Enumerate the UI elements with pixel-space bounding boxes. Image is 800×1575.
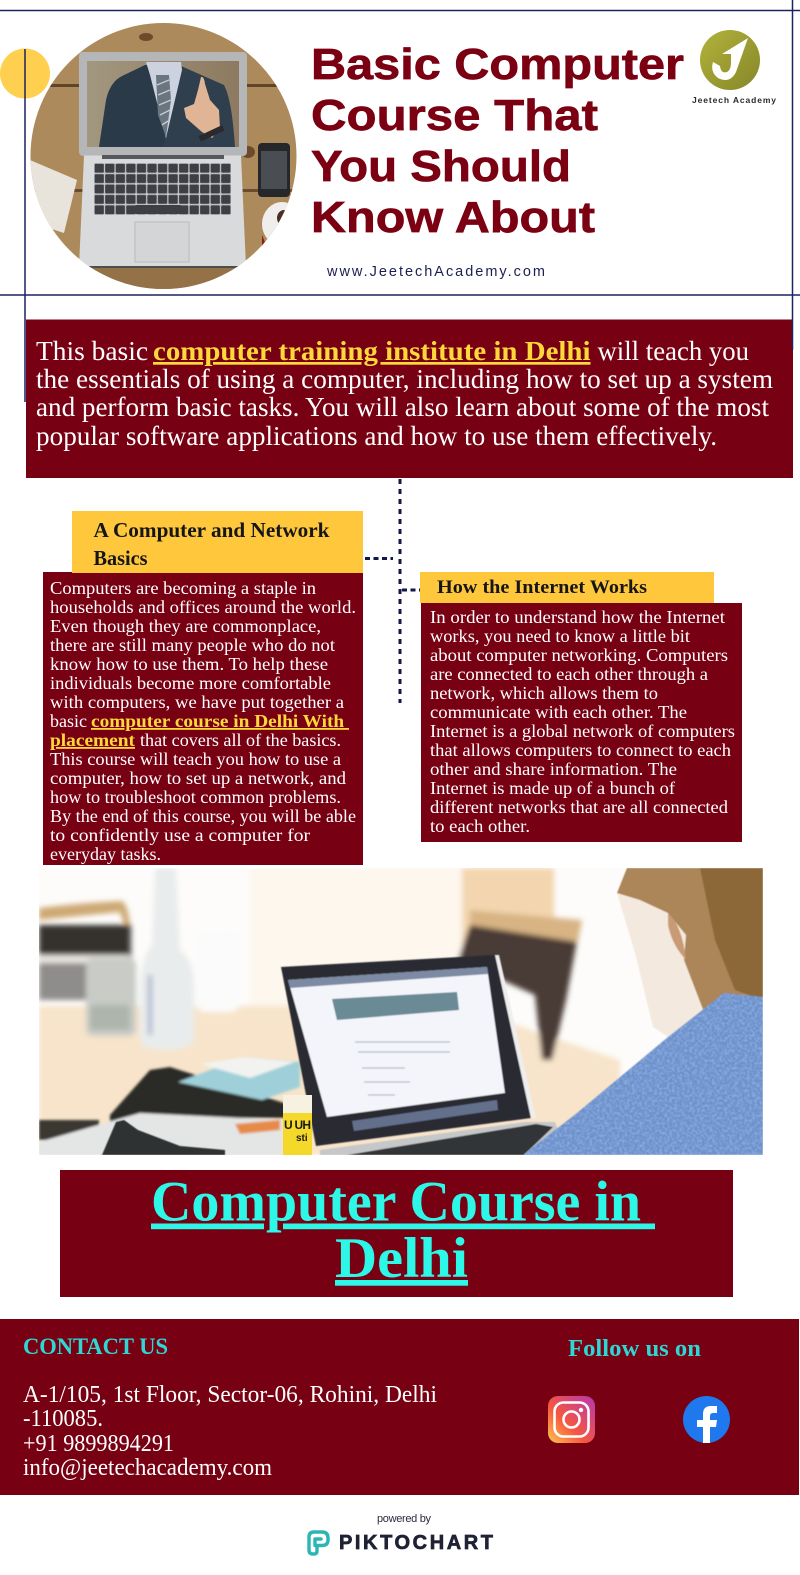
icon: facebook [683, 1396, 730, 1443]
panel: intro [26, 320, 793, 478]
logo: Piktochart: PIKTOCHART [339, 1532, 493, 1554]
powered by: powered by [377, 1513, 432, 1525]
body text: that allows computers to connect to each [430, 740, 731, 760]
panel: intro: will teach you [598, 336, 749, 366]
body text [50, 578, 356, 864]
right chair [458, 925, 578, 1060]
body text: know how to use them. To help these [50, 654, 328, 674]
body text: placement [50, 730, 135, 750]
body text: to confidently use a computer for [50, 825, 310, 845]
heading: Basics [94, 546, 148, 570]
laptop [281, 955, 560, 1155]
body text: there are still many people who do not [50, 635, 335, 655]
website url: www.JeetechAcademy.com [326, 264, 545, 280]
heading [420, 572, 714, 603]
body text: with computers, we have put together a [50, 692, 344, 712]
connector lines [365, 479, 420, 703]
person [523, 868, 763, 1155]
folder and notebook [110, 1067, 300, 1122]
hand [184, 77, 220, 138]
body text: This course will teach you how to use a [50, 749, 341, 769]
image: woman working on laptop [39, 868, 763, 1155]
contact details: +91 9899894291 [23, 1431, 174, 1457]
body text: other and share information. The [430, 759, 677, 779]
body text: computer, how to set up a network, and [50, 768, 346, 788]
follow heading: Follow us on [568, 1336, 701, 1362]
panel: contact footer [0, 1319, 799, 1495]
body text: that covers all of the basics. [140, 730, 341, 750]
image: laptop on wooden desk in circle [30, 22, 302, 290]
panel: Computer Course in Delhi: Computer Course in [151, 1170, 655, 1234]
body text: everyday tasks. [50, 844, 161, 864]
body text: In order to understand how the Internet [430, 607, 725, 627]
body text: Internet is made up of a bunch of [430, 778, 675, 798]
pouch [102, 1120, 225, 1155]
panel: How the Internet Works [420, 572, 742, 842]
panel: Computer Course in Delhi [60, 1170, 733, 1297]
bottle, jar [140, 868, 194, 1050]
panel: intro: This basic [36, 336, 148, 366]
decorative yellow circle [0, 48, 50, 98]
title: Know About [311, 193, 595, 242]
body text: network, which allows them to [430, 683, 658, 703]
heading: A Computer and Network [94, 518, 330, 542]
body text: different networks that are all connected [430, 797, 728, 817]
man [99, 65, 166, 147]
body text: By the end of this course, you will be able [50, 806, 356, 826]
body text: about computer networking. Computers [430, 645, 728, 665]
body text: to each other. [430, 816, 530, 836]
panel: intro: and perform basic tasks. You will also learn about some of the most [36, 392, 769, 422]
title: Course That [311, 91, 598, 140]
frame lines [0, 0, 800, 402]
contact heading: CONTACT US [23, 1334, 168, 1359]
body text: Internet is a global network of computers [430, 721, 735, 741]
body text: works, you need to know a little bit [430, 626, 690, 646]
cup [262, 202, 288, 239]
logo: Jeetech Academy: Jeetech Academy [692, 95, 776, 105]
logo: Jeetech Academy [692, 30, 776, 105]
body text: computer course in Delhi With [91, 711, 349, 731]
papers [39, 1113, 283, 1155]
icon: instagram [548, 1396, 595, 1443]
body text: communicate with each other. The [430, 702, 687, 722]
heading [72, 511, 363, 573]
glue stick [283, 1095, 312, 1155]
panel: Computer Course in Delhi: Delhi [335, 1227, 468, 1290]
glue stick: U UH [284, 1118, 311, 1132]
body text: are connected to each other through a [430, 664, 708, 684]
left chair [39, 925, 132, 1000]
body text: Even though they are commonplace, [50, 616, 321, 636]
heading: How the Internet Works [437, 577, 647, 598]
contact details: info@jeetechacademy.com [23, 1455, 272, 1481]
panel: intro: popular software applications and how to use them effectively. [36, 421, 717, 451]
body text: individuals become more comfortable [50, 673, 331, 693]
laptop screen [79, 52, 247, 156]
panel: intro: the essentials of using a computer, including how to set up a system [36, 364, 773, 394]
body text: basic [50, 711, 87, 731]
contact details: A-1/105, 1st Floor, Sector-06, Rohini, Delhi [23, 1382, 437, 1408]
title: You Should [311, 142, 571, 191]
glue stick: sti [296, 1133, 308, 1144]
contact details [23, 1382, 437, 1481]
laptop base [79, 156, 246, 267]
paper [30, 160, 77, 233]
body text [430, 607, 735, 836]
title: Basic Computer [311, 40, 684, 89]
phone [258, 143, 290, 197]
panel: A Computer and Network Basics [43, 511, 363, 865]
body text: how to troubleshoot common problems. [50, 787, 341, 807]
title [311, 40, 684, 242]
panel: intro: computer training institute in Delhi [153, 336, 591, 366]
body text: Computers are becoming a staple in [50, 578, 316, 598]
body text: households and offices around the world. [50, 597, 356, 617]
contact details: -110085. [23, 1406, 103, 1432]
